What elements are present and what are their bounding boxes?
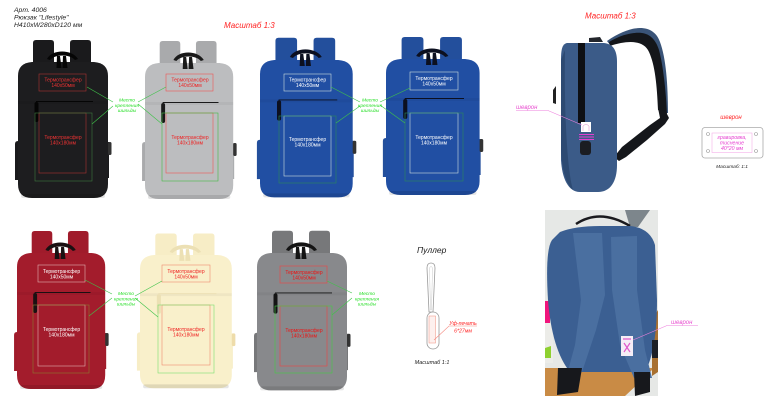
puller title: Пуллер <box>417 245 447 255</box>
callout: attachment 2: крепления <box>358 104 382 109</box>
chevron callout: photo: шеврон <box>671 320 693 326</box>
backpack: red: Термотрансфер <box>43 327 80 333</box>
callout: attachment 1: крепления <box>115 104 139 109</box>
backpack: light grey: Термотрансфер <box>171 135 209 141</box>
backpack: red: 140х180мм <box>48 332 75 338</box>
puller drawing <box>427 263 439 349</box>
backpack: blue right <box>383 37 483 195</box>
scale label front views: Масштаб 1:3 <box>224 21 275 30</box>
product heading <box>13 7 83 29</box>
backpack: blue left: 140х180мм <box>294 142 321 148</box>
scale label chevron: Масштаб: 1:1 <box>716 164 748 170</box>
backpack: black: 140х180мм <box>50 140 77 146</box>
callout: attachment 4: крепления <box>355 298 379 302</box>
puller callout <box>434 321 477 340</box>
chevron callout: side view: шеврон <box>516 105 538 111</box>
backpack: black: Термотрансфер <box>44 78 82 84</box>
chevron callout: side view <box>516 105 582 125</box>
backpack: blue right: 140х50мм <box>422 82 446 88</box>
side tag <box>579 122 594 140</box>
photo: real backpack <box>545 210 658 396</box>
backpack: black <box>15 40 112 198</box>
backpack: black: Термотрансфер <box>44 135 82 141</box>
callout: attachment 4: Место <box>359 291 375 297</box>
backpack: red <box>14 231 109 389</box>
scale label puller: Масштаб 1:1 <box>415 360 449 366</box>
callout: attachment 1: Место <box>119 98 135 104</box>
chevron drawing: 40*20 мм <box>721 146 743 152</box>
backpack: cream: Термотрансфер <box>167 327 205 333</box>
product heading: Рюкзак "Lifestyle" <box>14 14 69 22</box>
backpack: cream <box>137 233 235 388</box>
product heading: Арт. 4006 <box>13 7 47 14</box>
backpack: blue right: 140х180мм <box>421 140 448 146</box>
backpack: red: Термотрансфер <box>43 269 80 275</box>
chevron drawing: шеврон <box>720 115 742 121</box>
backpack: dark grey: 140х50мм <box>292 276 316 282</box>
backpack: dark grey: Термотрансфер <box>285 270 323 276</box>
backpack: dark grey: Термотрансфер <box>285 328 323 334</box>
callout: attachment 2: Место <box>362 98 378 104</box>
scale label side view: Масштаб 1:3 <box>585 12 636 20</box>
callout: attachment 2: шильды <box>361 108 380 114</box>
puller callout: 6*27мм <box>454 328 472 334</box>
leader lines: label attachment <box>85 87 410 317</box>
callout: attachment 3: крепления <box>114 298 138 302</box>
puller callout: Уф-печать <box>449 321 477 327</box>
backpack: cream: 140х50мм <box>174 274 198 280</box>
product heading: H410xW280xD120 мм <box>14 22 83 29</box>
backpack: light grey: Термотрансфер <box>171 78 209 84</box>
backpack: dark grey: 140х180мм <box>291 334 318 340</box>
backpack: blue right: Термотрансфер <box>415 76 453 82</box>
backpack: blue left: 140х50мм <box>296 83 320 89</box>
backpack: blue left: Термотрансфер <box>289 137 326 143</box>
backpack: dark grey <box>254 231 350 390</box>
backpack: light grey: 140х50мм <box>178 83 202 89</box>
backpack: blue left: Термотрансфер <box>289 78 326 84</box>
backpack: blue left <box>257 38 356 197</box>
backpack: black: 140х50мм <box>51 83 75 89</box>
chevron drawing <box>702 115 763 158</box>
backpack: light grey: 140х180мм <box>177 140 204 146</box>
backpack: red: 140х50мм <box>50 274 74 280</box>
chevron drawing: гравировка, <box>717 135 747 141</box>
callout: attachment 4: шильды <box>358 302 377 308</box>
chevron drawing: тиснение <box>720 140 744 146</box>
callout: attachment 1: шильды <box>118 108 137 114</box>
backpack: light grey <box>142 41 237 199</box>
callout: attachment 3: Место <box>118 291 134 297</box>
backpack: side view <box>553 28 669 192</box>
backpack: cream: 140х180мм <box>173 332 200 338</box>
backpack: cream: Термотрансфер <box>167 269 205 275</box>
chevron callout: photo <box>633 320 698 340</box>
backpack: blue right: Термотрансфер <box>415 135 453 141</box>
callout: attachment 3: шильды <box>117 302 136 308</box>
